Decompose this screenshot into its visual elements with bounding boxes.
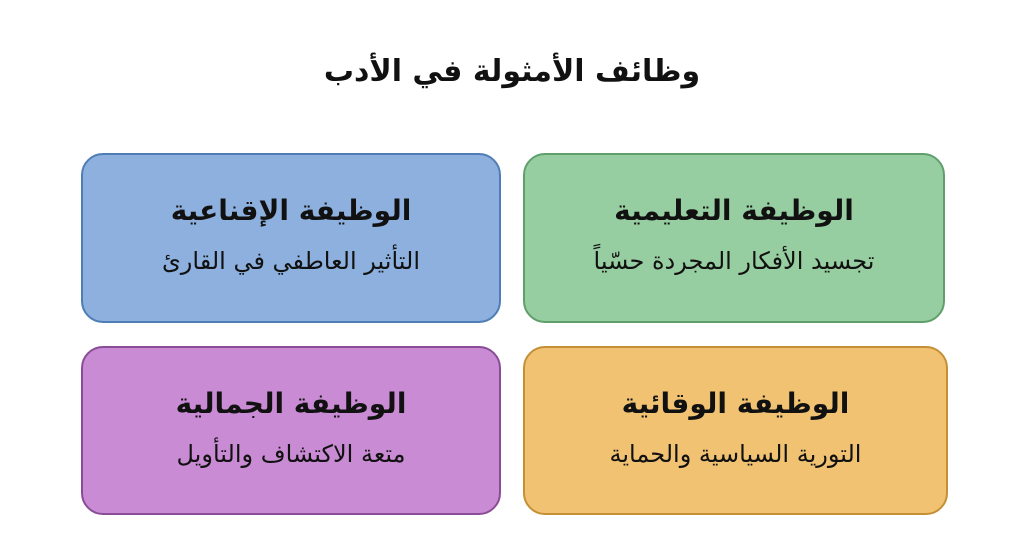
panel: persuasive (81, 153, 501, 323)
text: educational: تجسيد الأفكار المجردة حسّياً (594, 247, 874, 275)
text: protective: التورية السياسية والحماية (610, 440, 861, 468)
panel: aesthetic (81, 346, 501, 515)
text: aesthetic: متعة الاكتشاف والتأويل (176, 440, 406, 468)
panel: protective (523, 346, 948, 515)
heading: educational: الوظيفة التعليمية (614, 194, 854, 227)
heading: protective: الوظيفة الوقائية (622, 387, 849, 420)
text: persuasive: التأثير العاطفي في القارئ (162, 247, 420, 275)
heading: aesthetic: الوظيفة الجمالية (176, 387, 406, 420)
heading: persuasive: الوظيفة الإقناعية (171, 194, 411, 227)
title: وظائف الأمثولة في الأدب (324, 54, 700, 89)
panel: educational (523, 153, 945, 323)
